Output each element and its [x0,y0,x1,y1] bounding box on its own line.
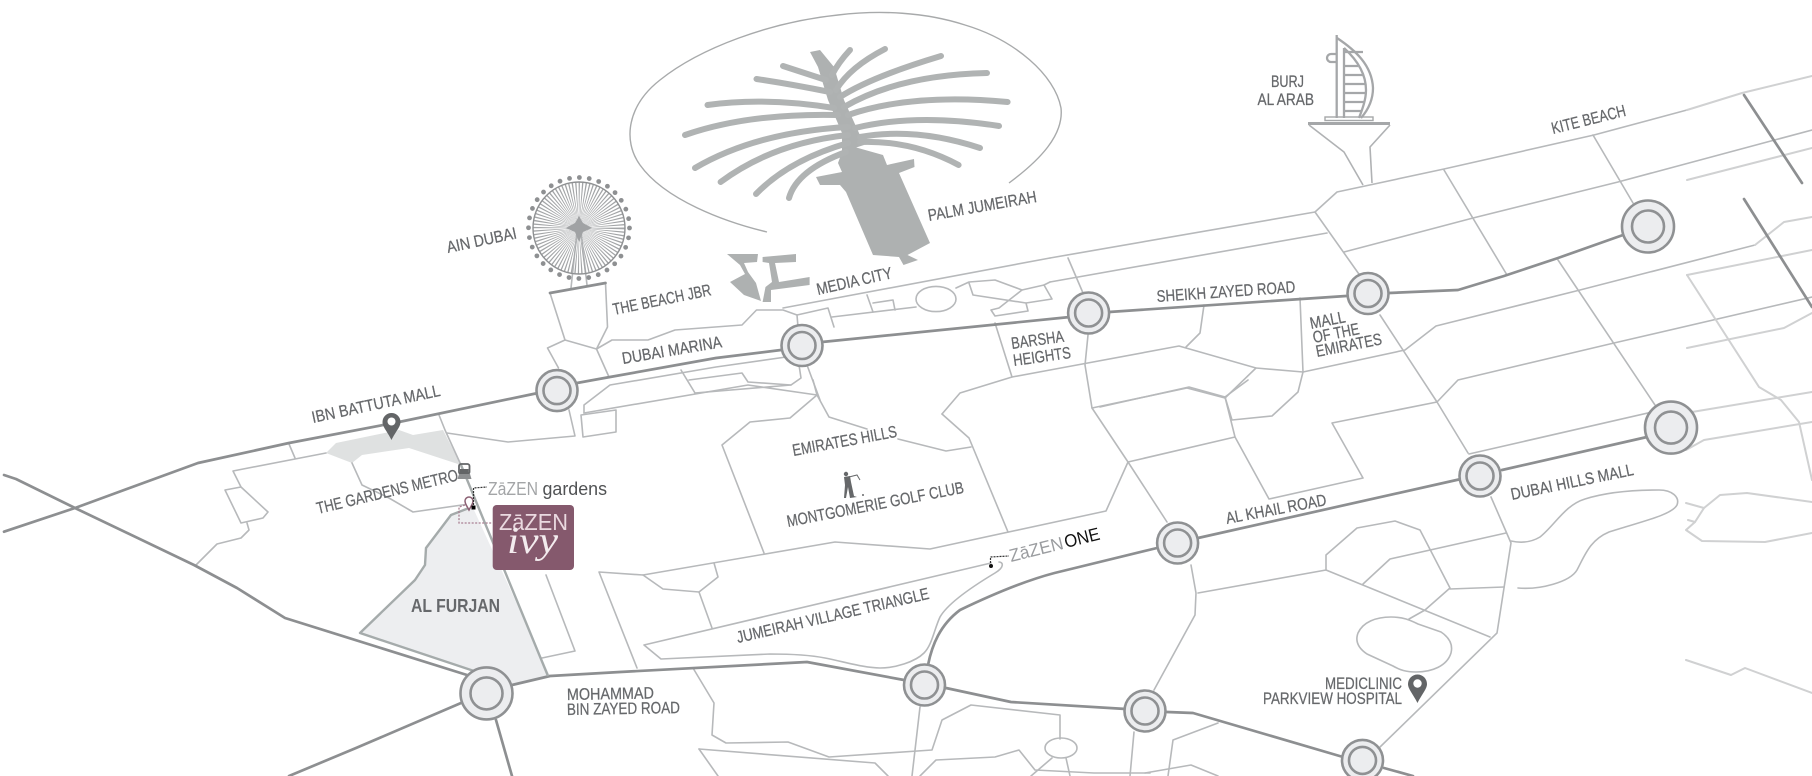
wheel cabins [528,178,630,278]
label: Al Furjan: AL FURJAN [411,596,500,616]
roundabout: JVT [904,664,945,706]
logo: Zazen Ivy badge [493,505,574,570]
label: Dubai Hills Mall: DUBAI HILLS MALL [1509,461,1635,504]
palm fronds [685,49,1008,198]
label: Mediclinic Parkview Hospital [1263,675,1402,708]
icon: Ain Dubai wheel [528,178,630,278]
palm stem [810,50,864,152]
roundabout: Al Khail [1157,522,1198,564]
logo: Zazen gardens: gardens [542,479,607,499]
label: Jumeirah Village Triangle: JUMEIRAH VILLAGE TRIANGLE [735,585,931,647]
Al Furjan outline [360,508,474,671]
marker: Zazen Ivy connector and pin [459,497,492,523]
label: Mall of the Emirates: EMIRATES [1314,330,1384,361]
label: The Beach JBR: THE BEACH JBR [611,281,713,319]
icon: Palm Jumeirah [630,12,1061,265]
label: Mediclinic Parkview Hospital: PARKVIEW HOSPITAL [1263,690,1402,708]
icon: Ibn Battuta pin [382,413,400,440]
roundabout: Barsha Heights [1068,292,1109,334]
roundabout: east Al Khail [1645,402,1697,454]
icon: golfer [844,472,864,498]
palm trunk [816,147,930,265]
logo: Zazen One: ONE [1062,524,1102,552]
label: Mohammad Bin Zayed Road: BIN ZAYED ROAD [567,699,680,719]
area: Al Furjan [360,508,550,685]
label: Media City: MEDIA CITY [815,264,894,299]
label: The Gardens Metro: THE GARDENS METRO [315,467,460,518]
logo: Zazen Ivy badge: ivy [507,520,558,562]
logo: Zazen One: ZāZEN [1007,533,1065,566]
icon: The Beach JBR blocks [727,254,810,302]
roundabout: Dubai Hills [1460,456,1500,496]
label: Burj Al Arab: BURJ [1271,73,1304,91]
roundabout: MBZ east [1342,740,1383,776]
roundabout: Al Furjan [460,667,512,719]
label: Emirates Hills: EMIRATES HILLS [791,423,898,460]
label: Kite Beach: KITE BEACH [1550,102,1628,138]
marker: Zazen One connector [989,556,1009,568]
label: Palm Jumeirah: PALM JUMEIRAH [927,188,1038,225]
label: Mall of the Emirates [1308,308,1384,361]
label: Ain Dubai: AIN DUBAI [445,225,518,257]
logo: Zazen One [1007,524,1102,566]
roundabout: Ibn Battuta [536,370,578,411]
label: Mall of the Emirates: MALL [1308,308,1347,333]
label: Ibn Battuta Mall: IBN BATTUTA MALL [310,382,442,427]
label: Sheikh Zayed Road: SHEIKH ZAYED ROAD [1156,278,1296,306]
label: Barsha Heights: BARSHA [1010,328,1065,353]
icon: Mediclinic pin [1408,674,1427,703]
palm crescent outline [630,12,1061,232]
logo: Zazen gardens: ZāZEN [488,479,538,499]
roundabout: Kite Beach [1622,200,1674,252]
logo: Zazen Ivy badge: ZāZEN [499,509,568,535]
label: Burj Al Arab [1258,73,1314,109]
wheel rim [533,182,625,274]
label: Mohammad Bin Zayed Road: MOHAMMAD [567,684,654,704]
roundabout: Mall of the Emirates [1348,273,1388,314]
label: Montgomerie Golf Club: MONTGOMERIE GOLF CLUB [785,479,965,531]
label: Mediclinic Parkview Hospital: MEDICLINIC [1325,675,1402,693]
wheel spokes [556,205,602,251]
label: Barsha Heights [1010,328,1072,370]
marker: Zazen Gardens connector [472,487,487,510]
label: Barsha Heights: HEIGHTS [1012,344,1072,370]
logo: Zazen gardens [488,479,607,499]
roundabout: MBZ mid [1124,690,1166,732]
label: Mall of the Emirates: OF THE [1311,320,1361,347]
label: Al Khail Road: AL KHAIL ROAD [1224,491,1328,528]
roundabout: Dubai Marina [782,325,822,366]
label: Burj Al Arab: AL ARAB [1258,91,1314,109]
faded roads at right edge [1686,76,1812,693]
wheel hub [566,216,592,242]
Al Furjan east edge road [461,465,548,676]
roundabouts [460,200,1697,776]
thin road network [196,110,1812,776]
icon: Burj Al Arab [1308,35,1390,185]
label: Dubai Marina: DUBAI MARINA [621,333,723,368]
label: Mohammad Bin Zayed Road [567,684,680,719]
icon: metro train [458,464,472,479]
park area near Ibn Battuta [326,430,461,465]
